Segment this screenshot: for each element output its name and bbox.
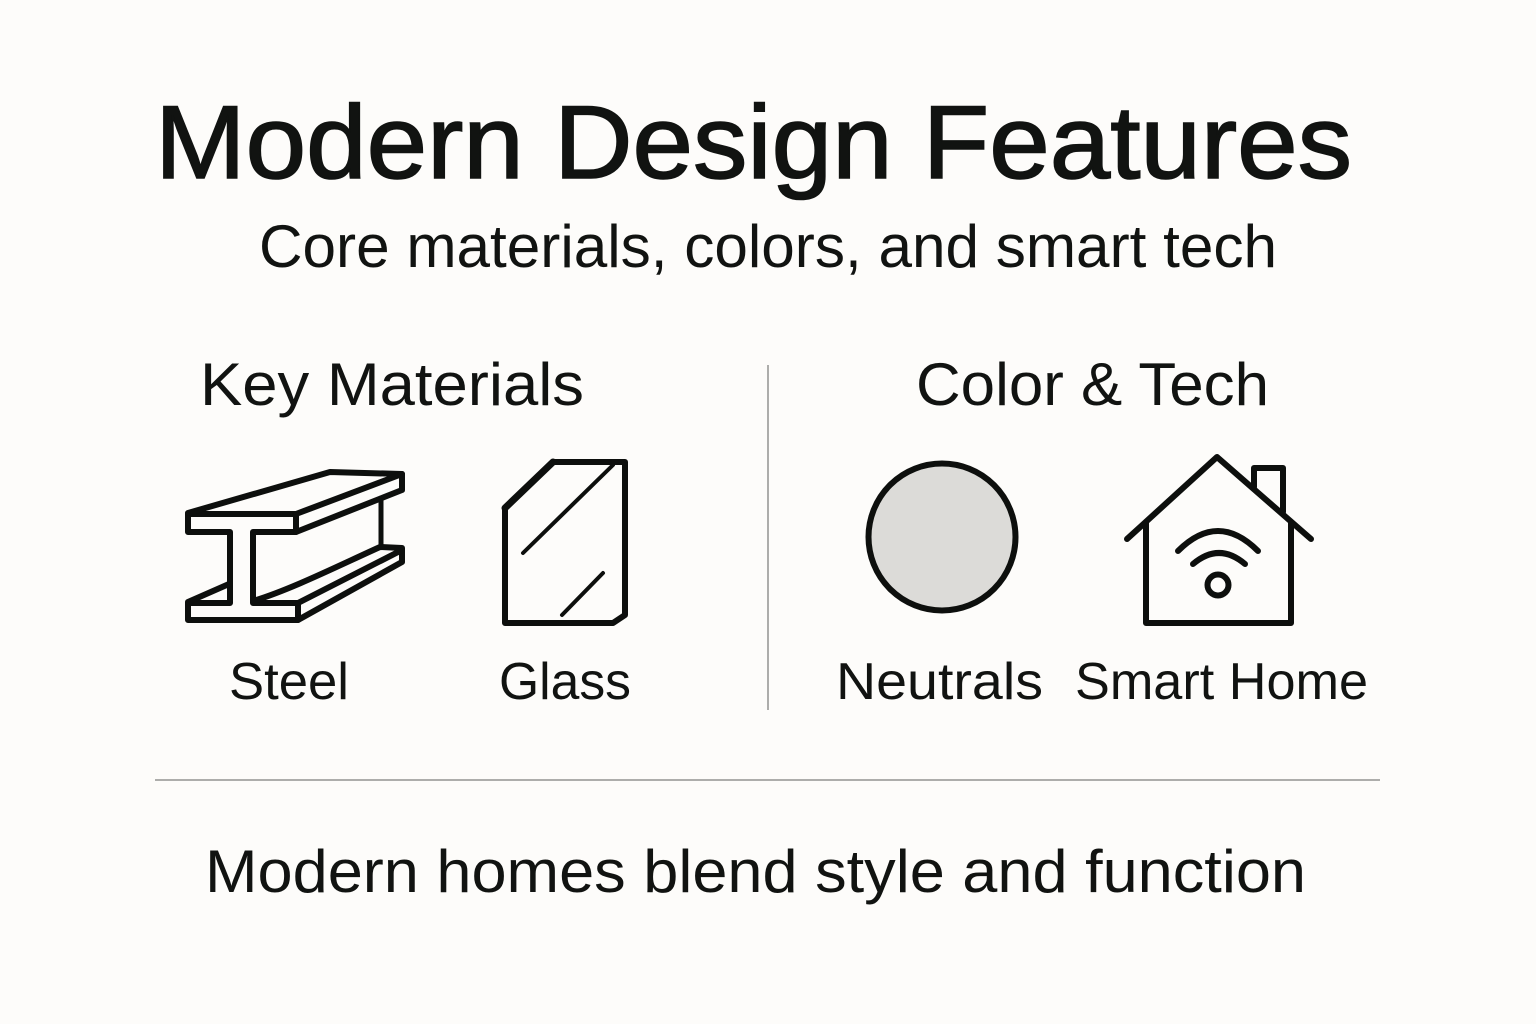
footer tagline: Modern homes blend style and function (205, 838, 1306, 905)
label: neutrals: Neutrals (836, 653, 1043, 711)
icon: steel I-beam (188, 472, 402, 620)
title: Modern Design Features (155, 85, 1352, 201)
icon: neutral colour swatch (868, 464, 1016, 610)
subtitle: Core materials, colors, and smart tech (259, 213, 1277, 280)
icon: glass pane (505, 462, 625, 623)
label: steel: Steel (229, 653, 349, 711)
label: glass: Glass (499, 653, 631, 711)
label: smart home: Smart Home (1075, 653, 1368, 711)
icon: smart home (1127, 457, 1311, 623)
heading: key materials: Key Materials (200, 351, 584, 418)
heading: color and tech: Color & Tech (916, 351, 1269, 418)
